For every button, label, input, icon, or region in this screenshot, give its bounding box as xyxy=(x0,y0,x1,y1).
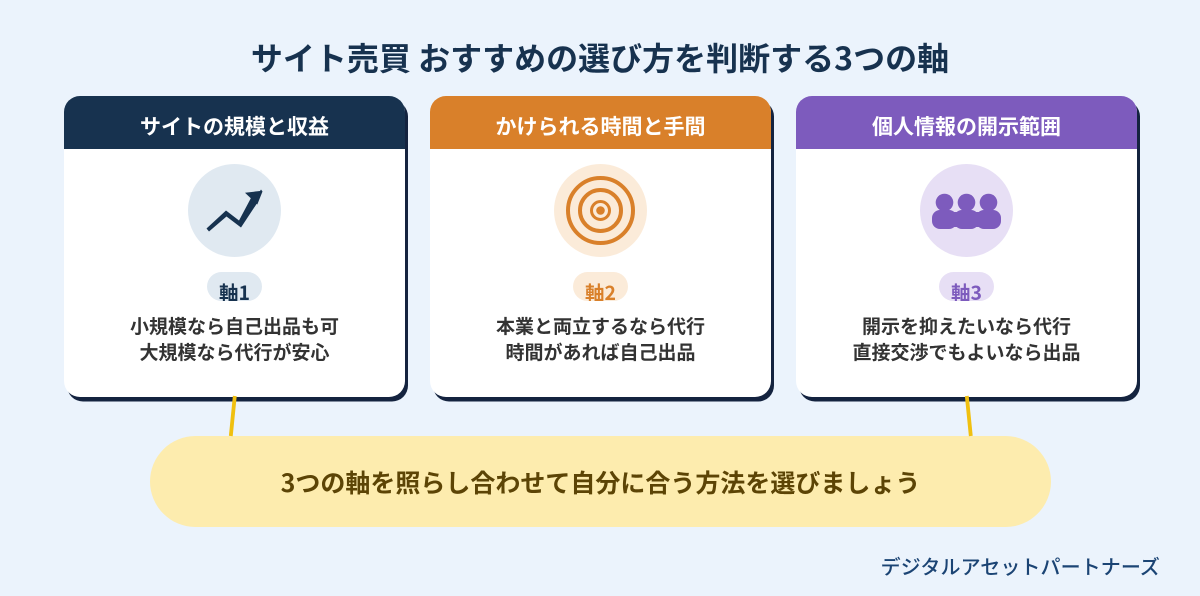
footer credit: デジタルアセットパートナーズ xyxy=(881,551,1160,580)
axis badge 1 xyxy=(207,272,262,301)
panel heading: axis 2 xyxy=(430,96,771,149)
text: axis 2 guidance xyxy=(496,312,705,365)
text: axis 2 guidance: 時間があれば自己出品 xyxy=(505,338,696,365)
text: axis 2 guidance: 本業と両立するなら代行 xyxy=(496,312,705,339)
callout xyxy=(150,436,1051,527)
panel: axis 1 xyxy=(64,96,405,397)
text: axis 3 guidance: 開示を抑えたいなら代行 xyxy=(862,312,1071,339)
panel heading: axis 2: かけられる時間と手間 xyxy=(496,111,706,141)
axis badge 3 xyxy=(939,272,994,301)
icon: three people xyxy=(920,164,1013,257)
text: axis 1 guidance: 小規模なら自己出品も可 xyxy=(130,312,339,339)
text: axis 1 guidance: 大規模なら代行が安心 xyxy=(139,338,330,365)
panel heading: axis 3: 個人情報の開示範囲 xyxy=(872,111,1061,141)
icon: rising chart arrow xyxy=(188,164,281,257)
panel heading: axis 1: サイトの規模と収益 xyxy=(140,111,329,141)
text: axis 1 guidance xyxy=(130,312,339,365)
text: axis 3 guidance xyxy=(852,312,1080,365)
panel: axis 3 xyxy=(796,96,1137,397)
axis badge 2 xyxy=(573,272,628,301)
panel: axis 2 xyxy=(430,96,771,397)
panel heading: axis 3 xyxy=(796,96,1137,149)
text: axis 3 guidance: 直接交渉でもよいなら出品 xyxy=(852,338,1080,365)
title: サイト売買 おすすめの選び方を判断する3つの軸 xyxy=(251,34,949,80)
panel heading: axis 1 xyxy=(64,96,405,149)
callout: 3つの軸を照らし合わせて自分に合う方法を選びましょう xyxy=(281,464,920,500)
icon: target xyxy=(554,164,647,257)
